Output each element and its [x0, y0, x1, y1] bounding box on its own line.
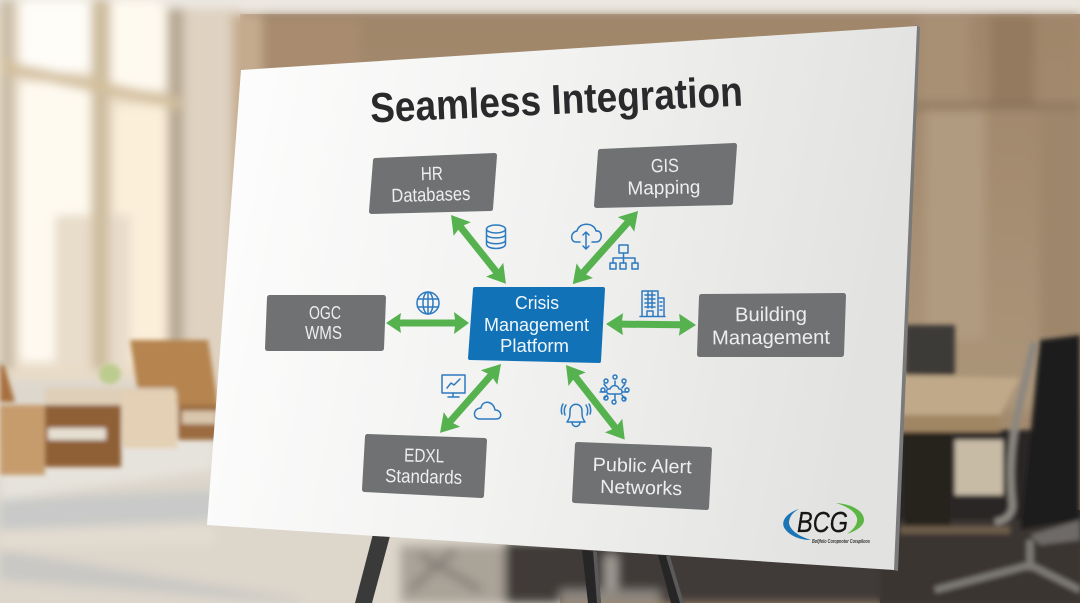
central box: Crisis Management Platform: Management: [484, 315, 589, 335]
box: EDXL Standards: Standards: [385, 466, 462, 489]
box: Building Management: [700, 296, 844, 354]
lounge furniture: [0, 340, 220, 475]
box: GIS Mapping: Mapping: [627, 177, 701, 200]
box: GIS Mapping: GIS: [651, 156, 679, 177]
box: Building Management: Management: [712, 327, 830, 349]
box: Public Alert Networks: Public Alert: [592, 455, 693, 478]
box: OGC WMS: [268, 298, 384, 348]
conference room furniture: [880, 325, 1080, 603]
box: HR Databases: HR: [421, 164, 443, 185]
easel legs: [355, 534, 684, 603]
lower floor and chair base behind the board: [400, 545, 505, 603]
logo: BCG: [783, 503, 870, 545]
box: HR Databases: Databases: [391, 184, 471, 207]
logo: BCG: BCG: [797, 507, 848, 539]
central box: Crisis Management Platform: [470, 289, 603, 361]
arrow: platform to Public Alert Networks: [557, 358, 633, 446]
box: EDXL Standards: [364, 436, 484, 496]
box: GIS Mapping: [596, 146, 734, 206]
box: EDXL Standards: EDXL: [404, 445, 444, 468]
icon: org network hierarchy: [610, 245, 638, 269]
box: HR Databases: [372, 156, 494, 212]
icon: database: [486, 225, 506, 248]
display board: [207, 25, 920, 571]
arrow: HR Databases to platform: [442, 208, 514, 291]
icon: chart monitor: [442, 375, 465, 397]
icon: cloud upload and download: [572, 224, 601, 249]
icon: alarm bell: [561, 404, 591, 426]
arrow: platform to Building Management: [606, 313, 696, 336]
arrow: GIS Mapping to platform: [565, 204, 646, 291]
arrow: OGC WMS to platform: [386, 312, 469, 334]
icon: cloud network hub: [600, 375, 629, 404]
box: OGC WMS: WMS: [305, 323, 342, 343]
box: Building Management: Building: [735, 304, 807, 326]
icon: globe: [417, 292, 439, 314]
box: OGC WMS: OGC: [309, 303, 341, 323]
icon: office building: [640, 291, 665, 316]
central box: Crisis Management Platform: Platform: [500, 336, 569, 356]
arrow: platform to EDXL Standards: [432, 357, 509, 440]
title: Seamless Integration: [369, 68, 744, 131]
box: Public Alert Networks: Networks: [600, 477, 682, 500]
icon: cloud: [474, 402, 501, 419]
logo: BCG: Bofjfolo Coropnoter Corapiloos: [812, 539, 870, 545]
box: Public Alert Networks: [574, 444, 710, 508]
central box: Crisis Management Platform: Crisis: [515, 293, 559, 313]
